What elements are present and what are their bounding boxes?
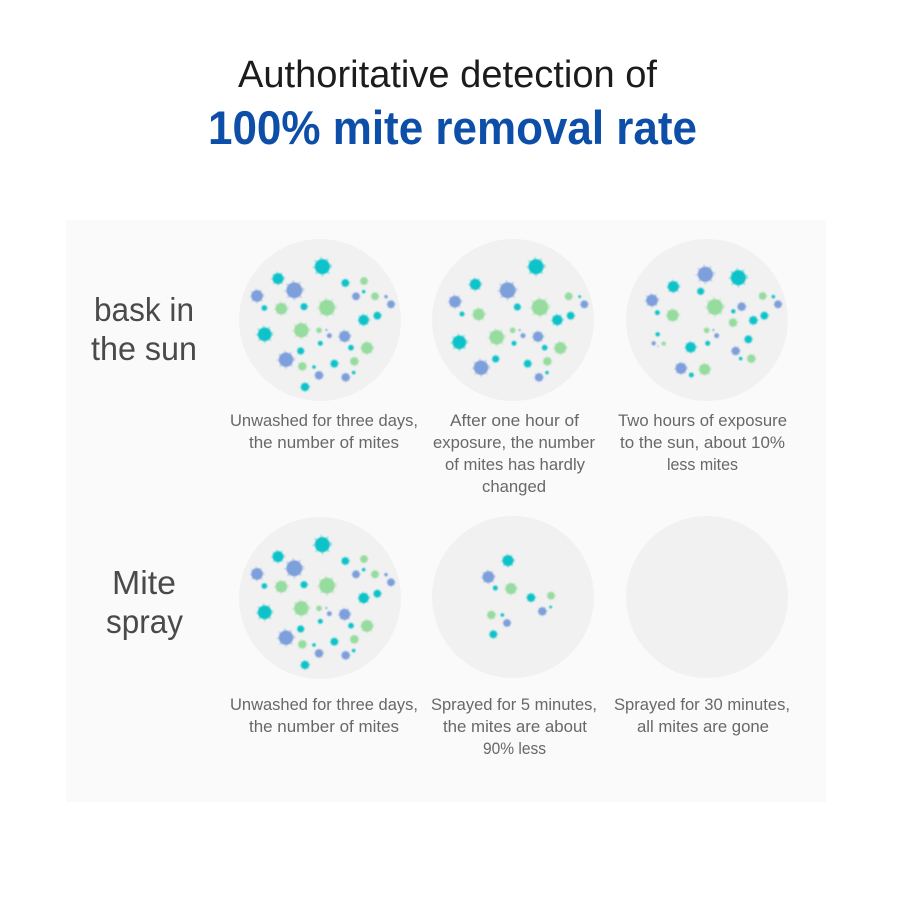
title <box>208 54 697 154</box>
row label: mite spray <box>106 564 183 640</box>
caption: sprayed for 30 minutes: all mites are gone <box>637 717 769 736</box>
dish: two hours in the sun <box>626 239 788 401</box>
caption: unwashed three days, sun row: Unwashed for three days, <box>230 411 418 430</box>
caption: sprayed for 30 minutes <box>614 695 790 736</box>
dish: unwashed three days, spray row <box>239 517 401 679</box>
caption: one hour in the sun <box>433 411 595 496</box>
caption: one hour in the sun: After one hour of <box>450 411 579 430</box>
caption: two hours in the sun: less mites <box>667 455 738 474</box>
caption: unwashed three days, spray row <box>230 695 418 736</box>
row label: bask in the sun <box>91 291 197 367</box>
caption: unwashed three days, spray row: Unwashed for three days, <box>230 695 418 714</box>
caption: sprayed for 5 minutes: 90% less <box>483 739 546 758</box>
caption: unwashed three days, sun row: the number of mites <box>249 433 399 452</box>
caption: unwashed three days, spray row: the number of mites <box>249 717 399 736</box>
panel: comparison background <box>66 220 826 802</box>
row label: mite spray: Mite <box>112 564 176 601</box>
caption: sprayed for 5 minutes: the mites are about <box>443 717 587 736</box>
row label: mite spray: spray <box>106 603 183 640</box>
caption: unwashed three days, sun row <box>230 411 418 452</box>
caption: one hour in the sun: of mites has hardly <box>445 455 586 474</box>
caption: two hours in the sun: to the sun, about 10% <box>620 433 785 452</box>
caption: sprayed for 5 minutes <box>431 695 597 758</box>
caption: two hours in the sun: Two hours of exposure <box>618 411 787 430</box>
caption: one hour in the sun: changed <box>482 477 546 496</box>
caption: two hours in the sun <box>618 411 787 474</box>
row label: bask in the sun: bask in <box>94 291 194 328</box>
dish: sprayed for 5 minutes <box>432 516 594 678</box>
dish: unwashed three days, sun row <box>239 239 401 401</box>
dish: sprayed for 30 minutes, empty <box>626 516 788 678</box>
caption: one hour in the sun: exposure, the number <box>433 433 595 452</box>
caption: sprayed for 30 minutes: Sprayed for 30 minutes, <box>614 695 790 714</box>
row label: bask in the sun: the sun <box>91 330 197 367</box>
dish: one hour in the sun <box>432 239 594 401</box>
title line: Authoritative detection of: Authoritative detection of <box>238 54 657 96</box>
caption: sprayed for 5 minutes: Sprayed for 5 minutes, <box>431 695 597 714</box>
title line: 100% mite removal rate: 100% mite removal rate <box>208 101 697 154</box>
